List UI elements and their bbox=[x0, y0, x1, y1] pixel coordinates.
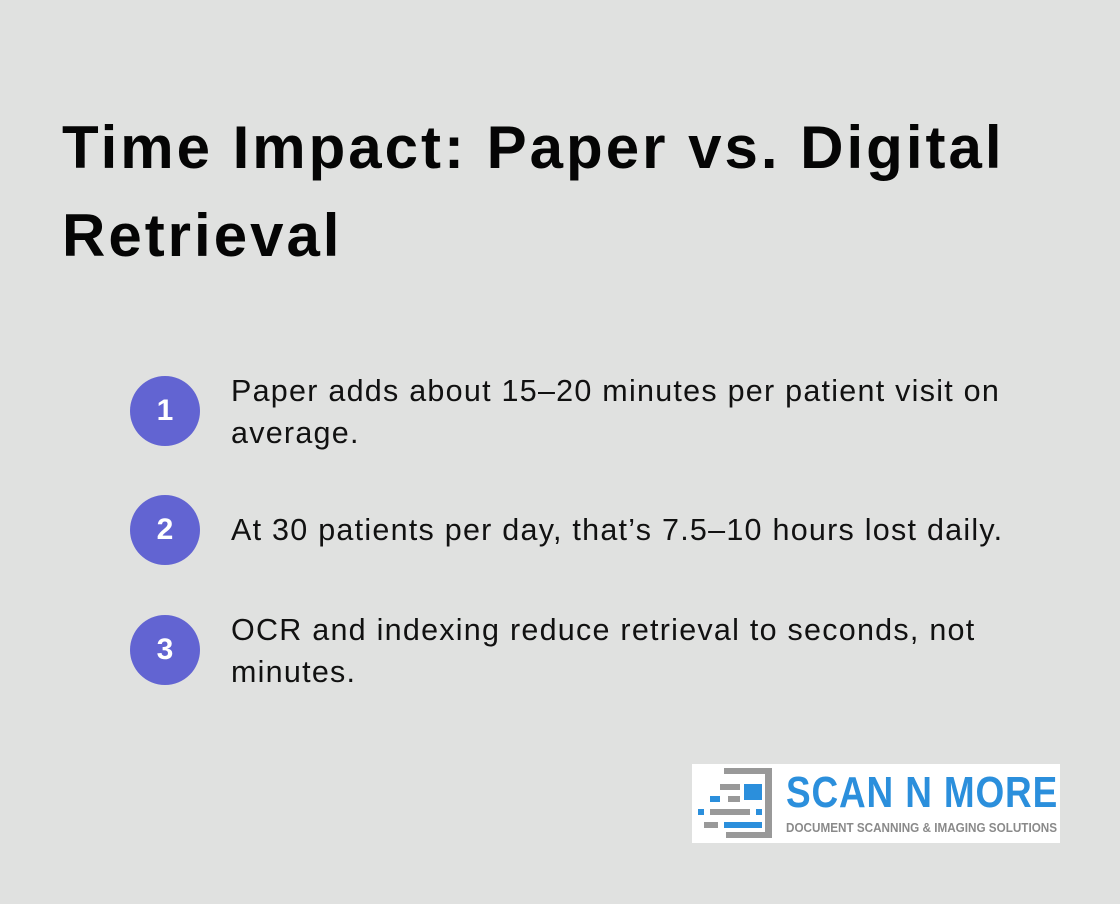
badge 1: 1 bbox=[157, 394, 173, 427]
text 1 bbox=[231, 374, 1000, 450]
text 1: average. bbox=[231, 416, 360, 450]
item 3 bbox=[130, 613, 976, 689]
logo bbox=[692, 764, 1060, 843]
item 2 bbox=[130, 495, 1003, 565]
title: Retrieval bbox=[62, 202, 342, 269]
title: Time Impact: Paper vs. Digital bbox=[62, 114, 1005, 181]
text 3: OCR and indexing reduce retrieval to seconds, not bbox=[231, 613, 976, 647]
badge 1 bbox=[130, 376, 200, 446]
text 2: At 30 patients per day, that’s 7.5–10 hours lost daily. bbox=[231, 513, 1003, 547]
item 1 bbox=[130, 374, 1000, 450]
text 3: minutes. bbox=[231, 655, 356, 689]
badge 3 bbox=[130, 615, 200, 685]
badge 3: 3 bbox=[157, 633, 173, 666]
text 3 bbox=[231, 613, 976, 689]
logo tagline: DOCUMENT SCANNING & IMAGING SOLUTIONS bbox=[786, 820, 1057, 835]
title bbox=[62, 114, 1005, 269]
text 1: Paper adds about 15–20 minutes per patient visit on bbox=[231, 374, 1000, 408]
badge 2 bbox=[130, 495, 200, 565]
logo icon bbox=[698, 768, 772, 838]
logo name: SCAN N MORE bbox=[786, 768, 1058, 817]
badge 2: 2 bbox=[157, 513, 173, 546]
